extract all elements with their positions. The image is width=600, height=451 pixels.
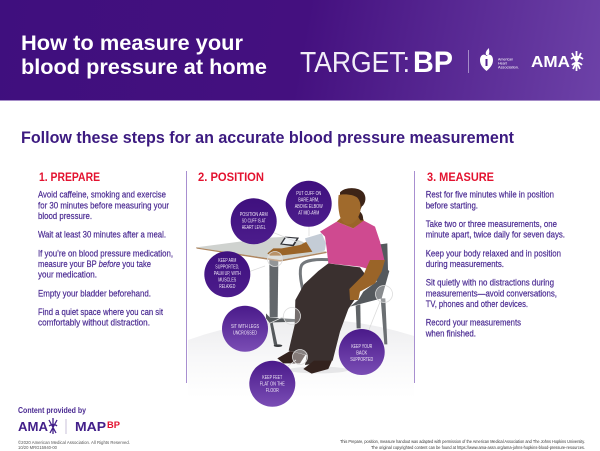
source note: The original copyrighted content can be found at https://www.ama-assn.org/ama-johns-hopkins-blood-pressure-resources. bbox=[371, 445, 585, 450]
panel: measure bbox=[425, 170, 565, 339]
table top bbox=[196, 237, 327, 260]
callout: put cuff: ABOVE ELBOW bbox=[295, 204, 323, 210]
copyright: 10/20 MRG15940-00 bbox=[18, 445, 58, 450]
title bbox=[21, 31, 267, 79]
callout: put cuff: AT MID-ARM bbox=[298, 210, 319, 216]
callout: feet flat bbox=[249, 361, 295, 407]
panel: prepare bbox=[38, 170, 173, 329]
panel: prepare: comfortably without distraction. bbox=[38, 318, 150, 329]
callout: put cuff: PUT CUFF ON bbox=[296, 191, 321, 197]
callout: feet flat: FLAT ON THE bbox=[260, 382, 285, 388]
callout: position arm bbox=[231, 198, 277, 244]
logo: Target BP bbox=[300, 46, 469, 79]
callout: position arm: SO CUFF IS AT bbox=[242, 218, 266, 224]
hand and forearm bbox=[267, 242, 314, 256]
illustration: seated person at table bbox=[196, 188, 389, 374]
logo: American Heart Association: Heart bbox=[498, 62, 507, 66]
panel: measure: during measurements. bbox=[426, 259, 504, 270]
title: blood pressure at home bbox=[21, 55, 267, 79]
panel: prepare: measure your BP before you take bbox=[38, 259, 151, 270]
heading: position: 2. POSITION bbox=[198, 170, 264, 184]
panel: measure: measurements—avoid conversations, bbox=[426, 288, 557, 299]
logo: American Heart Association: American bbox=[498, 58, 513, 62]
callout: put cuff: BARE ARM, bbox=[298, 198, 320, 204]
copyright: ©2020 American Medical Association. All Rights Reserved. bbox=[18, 440, 130, 445]
logo: American Heart Association: Association. bbox=[498, 66, 519, 70]
panel: measure: Keep your body relaxed and in position bbox=[426, 248, 561, 259]
callout: feet flat: KEEP FEET bbox=[262, 375, 283, 381]
blood pressure cuff bbox=[305, 233, 326, 253]
callout: legs uncrossed bbox=[222, 306, 268, 352]
panel: prepare: for 30 minutes before measuring your bbox=[38, 200, 170, 211]
logo: AMA and MAP BP: MAP bbox=[75, 419, 106, 434]
panel: measure: Sit quietly with no distractions during bbox=[426, 278, 554, 289]
trousers bbox=[289, 263, 366, 365]
panel: measure: TV, phones and other devices. bbox=[426, 299, 528, 310]
panel: measure: before starting. bbox=[426, 200, 478, 211]
floor shading bbox=[188, 319, 414, 398]
callout: keep arm supported: KEEP ARM bbox=[218, 258, 237, 264]
panel: prepare: Avoid caffeine, smoking and exercise bbox=[38, 190, 166, 201]
logo: AMA bbox=[531, 51, 583, 71]
subtitle: Follow these steps for an accurate blood pressure measurement bbox=[21, 129, 514, 147]
logo: Target BP: TARGET: bbox=[300, 47, 410, 79]
panel: measure: when finished. bbox=[425, 328, 476, 339]
title: How to measure your bbox=[21, 31, 244, 55]
credit: content provided by: Content provided by bbox=[18, 405, 86, 415]
panel: prepare: blood pressure. bbox=[38, 211, 92, 222]
callout: back supported: SUPPORTED bbox=[350, 357, 373, 363]
panel: measure: 3. MEASURE bbox=[427, 170, 494, 184]
logo: AMA and MAP BP bbox=[18, 418, 120, 434]
panel: prepare: your medication. bbox=[38, 270, 97, 281]
panel: prepare: 1. PREPARE bbox=[39, 170, 100, 184]
table legs bbox=[269, 260, 278, 317]
logo: AMA: AMA bbox=[531, 54, 570, 71]
column divider right bbox=[414, 171, 415, 383]
source note bbox=[340, 439, 585, 450]
callout: position arm: POSITION ARM bbox=[240, 212, 268, 218]
panel: measure: Record your measurements bbox=[426, 318, 521, 329]
callout: back supported bbox=[339, 329, 385, 375]
connector lines and joint highlights bbox=[248, 226, 392, 366]
hair and ponytail bbox=[340, 188, 365, 211]
BP monitor bbox=[280, 237, 299, 246]
panel: measure: Rest for five minutes while in position bbox=[426, 190, 554, 201]
copyright bbox=[18, 440, 130, 450]
callout: keep arm supported: PALM UP, WITH bbox=[214, 271, 241, 277]
callout: keep arm supported: SUPPORTED, bbox=[215, 264, 240, 270]
logo: Target BP: BP bbox=[413, 46, 453, 79]
shoes bbox=[277, 351, 305, 363]
logo: American Heart Association bbox=[480, 48, 519, 71]
column divider left bbox=[186, 171, 187, 383]
panel: prepare: Wait at least 30 minutes after a meal. bbox=[38, 230, 166, 241]
callout: legs uncrossed: SIT WITH LEGS bbox=[231, 324, 259, 330]
near arm and hand bbox=[349, 260, 385, 300]
callout: put cuff bbox=[286, 181, 332, 227]
panel: prepare: Empty your bladder beforehand. bbox=[38, 288, 151, 299]
panel: measure: minute apart, twice daily for seven days. bbox=[426, 230, 565, 241]
callout: legs uncrossed: UNCROSSED bbox=[233, 330, 257, 336]
panel: prepare: Find a quiet space where you can sit bbox=[38, 307, 163, 318]
face bbox=[338, 194, 361, 224]
torso bbox=[320, 220, 384, 270]
callout: keep arm supported: MUSCLES bbox=[218, 278, 236, 284]
panel: measure: Take two or three measurements, one bbox=[426, 219, 557, 230]
panel: prepare: If you’re on blood pressure medication, bbox=[38, 248, 173, 259]
callout: keep arm supported: RELAXED bbox=[219, 284, 235, 290]
callout: keep arm supported bbox=[204, 251, 250, 297]
callout: feet flat: FLOOR bbox=[266, 388, 279, 394]
chair back and legs bbox=[356, 304, 361, 328]
header banner bbox=[0, 0, 600, 101]
callout: back supported: KEEP YOUR bbox=[351, 344, 372, 350]
logo: AMA and MAP BP: BP bbox=[107, 420, 120, 430]
callout: position arm: HEART LEVEL bbox=[242, 225, 266, 231]
neck bbox=[337, 215, 364, 228]
callout: back supported: BACK bbox=[356, 350, 367, 356]
logo: AMA and MAP BP: AMA bbox=[18, 419, 49, 434]
